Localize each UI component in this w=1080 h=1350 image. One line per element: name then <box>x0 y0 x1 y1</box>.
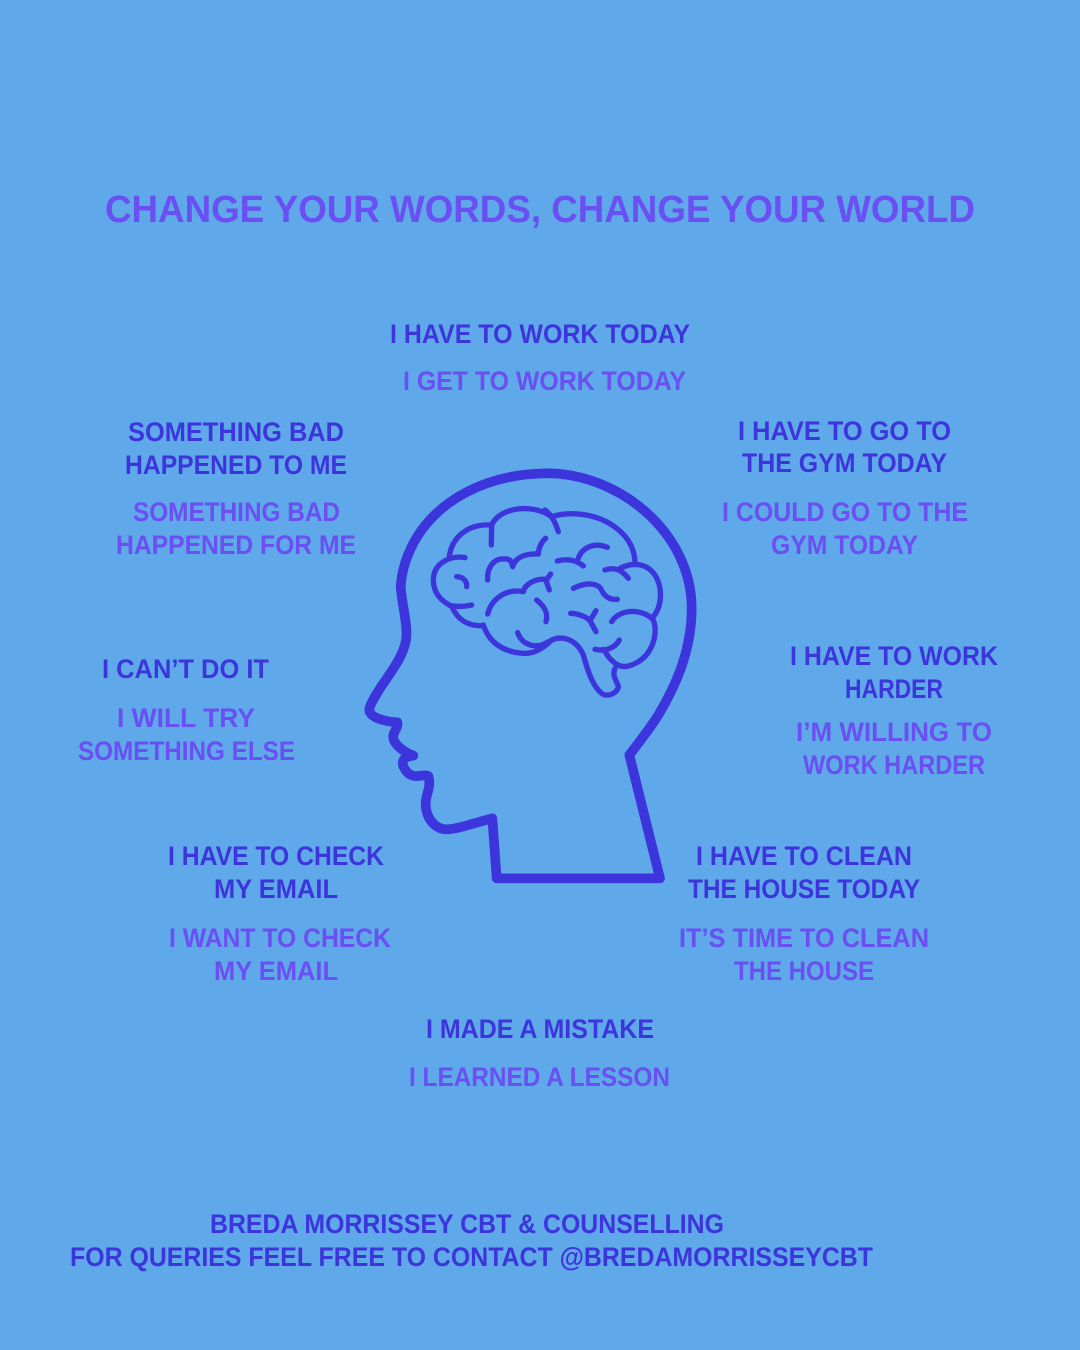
text block: mistake: I MADE A MISTAKE <box>426 1014 654 1044</box>
text block: can't do it: I WILL TRY <box>117 703 255 733</box>
text block: something bad <box>116 417 356 560</box>
text block: gym: I COULD GO TO THE <box>722 497 968 527</box>
text block: something bad: SOMETHING BAD <box>128 417 344 447</box>
text block: work today: I HAVE TO WORK TODAY <box>390 319 690 349</box>
text block: something bad: HAPPENED TO ME <box>125 450 347 480</box>
text block: mistake: I LEARNED A LESSON <box>409 1062 670 1092</box>
footer credit <box>70 1209 873 1272</box>
text block: clean the house <box>679 841 929 986</box>
text block: can't do it <box>78 654 295 766</box>
text block: check email: MY EMAIL <box>214 956 338 986</box>
text block: something bad: HAPPENED FOR ME <box>116 530 356 560</box>
brain <box>433 509 660 695</box>
text block: work harder: I’M WILLING TO <box>796 717 992 747</box>
text block: can't do it: I CAN’T DO IT <box>102 654 269 684</box>
icon: head with brain <box>369 473 692 878</box>
text block: clean the house: THE HOUSE TODAY <box>688 874 920 904</box>
text block: work today: I GET TO WORK TODAY <box>403 366 686 396</box>
text block: check email: MY EMAIL <box>214 874 338 904</box>
text block: clean the house: IT’S TIME TO CLEAN <box>679 923 929 953</box>
text block: gym: I HAVE TO GO TO <box>738 416 951 446</box>
head outline <box>369 473 692 878</box>
text block: work harder: I HAVE TO WORK <box>790 641 998 671</box>
text block: check email: I WANT TO CHECK <box>169 923 391 953</box>
text block: clean the house: THE HOUSE <box>734 956 874 986</box>
footer credit: FOR QUERIES FEEL FREE TO CONTACT @BREDAMORRISSEYCBT <box>70 1242 873 1272</box>
text block: can't do it: SOMETHING ELSE <box>78 736 295 766</box>
footer credit: BREDA MORRISSEY CBT & COUNSELLING <box>210 1209 724 1239</box>
text block: gym <box>722 416 968 560</box>
text block: clean the house: I HAVE TO CLEAN <box>696 841 912 871</box>
text block: something bad: SOMETHING BAD <box>133 497 340 527</box>
text block: check email: I HAVE TO CHECK <box>168 841 384 871</box>
title: CHANGE YOUR WORDS, CHANGE YOUR WORLD <box>105 189 975 231</box>
text block: work today <box>390 319 690 396</box>
text block: work harder: WORK HARDER <box>803 750 985 780</box>
text block: check email <box>168 841 391 986</box>
text block: work harder <box>790 641 998 780</box>
text block: mistake <box>409 1014 670 1092</box>
text block: gym: GYM TODAY <box>771 530 918 560</box>
text block: gym: THE GYM TODAY <box>742 448 947 478</box>
text block: work harder: HARDER <box>845 674 943 704</box>
